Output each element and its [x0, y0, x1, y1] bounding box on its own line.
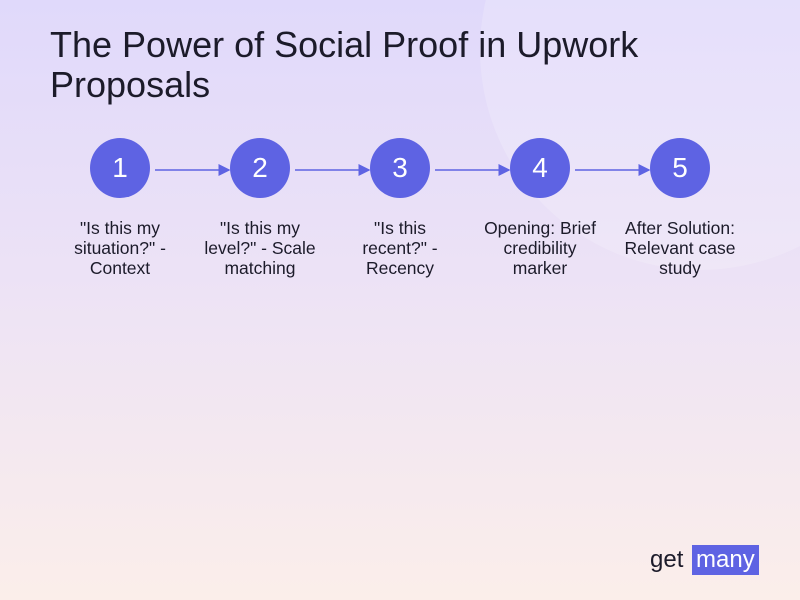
- step 3: [370, 138, 430, 198]
- step 3: 3: [392, 152, 408, 183]
- step 2 text: "Is this my level?" - Scale matching: [204, 218, 316, 278]
- step 1: [90, 138, 150, 198]
- step 2: [230, 138, 290, 198]
- step 4 text: Opening: Brief credibility marker: [484, 218, 596, 278]
- step 4: [510, 138, 570, 198]
- step 1 text: "Is this my situation?" - Context: [74, 218, 166, 278]
- step 4: 4: [532, 152, 548, 183]
- title: The Power of Social Proof in Upwork Proposals: [50, 24, 638, 105]
- step 1: 1: [112, 152, 128, 183]
- step 3 text: "Is this recent?" - Recency: [362, 218, 438, 278]
- step 5: 5: [672, 152, 688, 183]
- logo: many: [696, 546, 755, 573]
- step 2: 2: [252, 152, 268, 183]
- step 5 text: After Solution: Relevant case study: [625, 218, 735, 278]
- logo: get: [650, 546, 683, 573]
- logo: [650, 545, 759, 575]
- step 5: [650, 138, 710, 198]
